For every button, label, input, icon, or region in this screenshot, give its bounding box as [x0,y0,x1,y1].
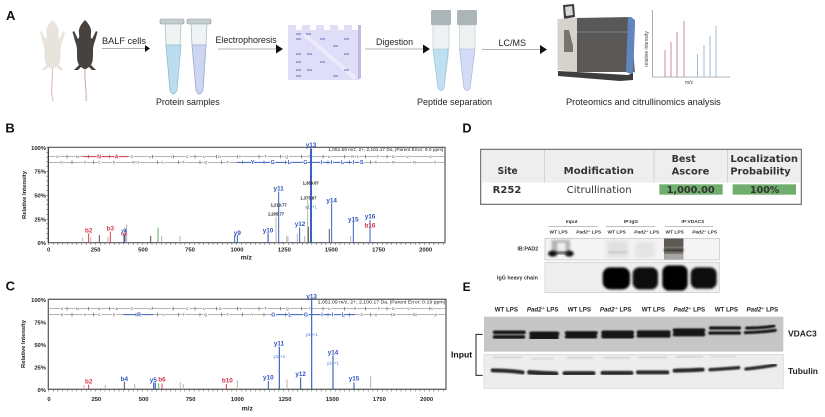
column headers: Input [566,219,578,225]
blot: PAD2 [545,238,719,260]
sequence ladder: L [341,160,345,166]
sequence ladder: G [218,154,221,159]
chart: schematic spectrum: relative intensity [644,31,650,67]
plot frame [48,147,445,243]
y axis: 100% [31,146,47,152]
panel label D: D [462,121,471,135]
peak labels: 1,375.87 [300,195,317,200]
x axis [47,244,445,261]
peak labels: y15 [349,376,360,383]
peak labels: y14 [328,350,339,357]
sequence ladder: Y [239,306,242,311]
y axis: Relative Intensity [22,170,28,219]
sequence ladder: Q [286,306,289,311]
table row: R252 [493,185,521,196]
sequence ladder: F [378,306,381,311]
lane labels: Pad2 [600,307,615,314]
sequence ladder: A [115,154,119,160]
lane labels: WT LPS [568,307,591,314]
sequence ladder: V [407,306,410,311]
icon: protein sample tubes [160,19,211,94]
sequence ladder: N [414,312,417,317]
sequence ladder: V [84,312,87,317]
peak labels: y10 [263,227,274,234]
icon: gel [288,25,361,80]
label: LC/MS: LC/MS [498,38,526,48]
peak labels: y12 [295,371,306,378]
parent ion info: 1,051.59 m/z, 2+, 2,101.17 Da, |Parent Error: 9.0 ppm| [328,147,443,152]
sequence ladder: G [218,306,222,311]
sequence ladder: F [377,154,380,159]
peaks [83,148,370,243]
lane labels: -/- [688,307,691,311]
sequence ladder: V [406,154,409,159]
column headers [548,219,718,236]
sequence ladder: L [288,312,292,318]
x axis: 2000 [420,397,433,403]
sequence ladder: F [113,312,116,317]
sequence ladder: I [332,312,334,318]
sequence ladder: I [321,312,323,318]
lane labels: LPS [691,307,705,314]
table headers [498,154,798,177]
panel: E input western blot [451,280,818,388]
sequence ladder: N [76,306,79,311]
sequence ladder: L [328,154,331,159]
peak labels: y11 [274,341,285,348]
column headers: Pad2 [634,230,646,236]
x axis: 1000 [231,397,244,403]
panel: IP western blot: IgG heavy chain [497,276,538,282]
sequence ladder: Q [204,312,207,317]
sequence ladder: T [308,154,311,159]
column headers: Pad2 [692,230,704,236]
y axis: 0% [38,241,47,247]
sequence ladder: N [98,306,101,311]
sequence ladder: N [97,154,101,160]
table row: 100% [750,185,780,196]
peak labels: b16 [365,223,376,230]
sequence ladder: G [392,306,395,311]
lane labels: -/- [761,307,764,311]
column headers: IP:VDAC3 [681,219,704,225]
peak labels: b6 [158,377,166,384]
x axis: 1000 [231,248,243,254]
chart: schematic spectrum [644,10,730,86]
sequence ladder: R+1 [351,154,359,159]
sequence ladder: T [264,306,267,311]
peak labels: y16 [365,213,376,220]
lane labels: Pad2 [674,307,689,314]
sequence ladder: N [392,160,395,165]
sequence ladder: I [353,160,355,166]
x axis: 1250 [278,248,291,254]
sequence ladder: I [171,154,172,159]
peak labels: 1,205.77 [268,212,285,217]
panel: A workflow [6,4,730,107]
peak labels: y14+1 [327,361,340,366]
sequence ladder: C [98,312,101,317]
x axis: 0 [47,397,51,403]
y axis [22,146,48,247]
x axis: 750 [186,397,196,403]
peak labels: b2 [85,379,93,386]
y axis: Relative Intensity [21,319,27,368]
x axis: 0 [47,248,50,254]
sequence ladder: I [172,306,173,311]
peak labels: y11+1 [305,205,317,210]
sequence ladder: V [435,312,438,317]
y axis: 25% [34,217,47,223]
blot: VDAC3 [484,317,783,352]
lane labels: -/- [542,307,545,311]
y axis: 100% [31,298,47,304]
sequence ladder: G [271,312,275,318]
sequence ladder: K [60,160,63,165]
peak labels: b4 [121,376,129,383]
icon: black mouse [72,20,98,101]
sequence ladder: L [162,160,165,165]
label: peptide separation: Peptide separation [417,97,492,107]
column headers: -/- [646,229,648,233]
table row [493,184,796,196]
icon: peptide tubes [431,10,477,90]
sequence ladder: C [186,306,189,311]
sequence ladder: T [182,312,185,317]
y axis: 25% [34,366,47,372]
sequence ladder: L [203,306,206,311]
column headers: -/- [588,229,590,233]
peak labels: b2 [85,227,93,234]
icon: mass spectrometer [558,4,635,81]
table frame and header [481,149,801,204]
sequence ladder: C [98,160,101,165]
sequence ladder [48,306,446,318]
peak labels: y9 [234,230,241,237]
panel: C spectrum [6,279,446,412]
peak labels: y13+1 [306,332,318,337]
sequence ladder: L [150,306,153,311]
y axis: 75% [34,320,47,326]
sequence ladder: T [182,160,185,165]
x axis: 1250 [279,397,291,403]
peak labels [85,142,376,237]
icon: white mouse [40,20,65,101]
sequence ladder: V [434,160,437,165]
x axis: 250 [91,397,101,403]
x axis: 500 [138,248,148,254]
sequence ladder: K [430,306,433,311]
y axis: 0% [38,388,47,394]
chart: schematic spectrum: m/z [685,80,694,86]
sequence ladder: A [374,160,377,165]
row labels: IB:PAD2 [517,247,538,253]
peak labels: y12 [295,221,306,228]
bracket: input [476,334,483,375]
arrow: to peptide separation [365,44,430,54]
sequence ladder: K [429,154,432,159]
sequence ladder: K [61,312,64,317]
lane labels: LPS [764,307,778,314]
peak labels: b3 [107,226,115,233]
x axis: 1750 [372,248,385,254]
x axis: 500 [139,397,149,403]
sequence ladder: S [130,306,133,311]
sequence ladder: G [303,160,307,166]
sequence ladder: Q [285,154,288,159]
lane labels: WT LPS [715,307,738,314]
peak labels: y4 [121,228,127,234]
sequence ladder: Q [204,160,207,165]
peak labels [85,293,360,386]
sequence ladder: T [264,154,267,159]
y axis: 75% [34,170,47,176]
sequence ladder: N [393,312,396,317]
table headers: Localization [730,154,798,165]
sequence ladder: I [321,160,323,166]
table row: Citrullination [567,185,632,196]
table headers: Site [498,166,518,177]
peak labels: y11+1 [274,354,286,359]
lane labels: WT LPS [495,307,518,314]
sequence ladder: R [137,312,141,318]
labels: blot targets: VDAC3 [788,328,817,338]
panel: D table [462,121,801,204]
x axis: 1750 [373,397,386,403]
sequence ladder: A [115,306,118,311]
column headers: WT LPS [608,230,627,236]
table headers: Modification [564,166,634,177]
sequence ladder: N [413,160,416,165]
sequence ladder [48,154,445,166]
column headers: LPS [648,230,660,236]
column headers: -/- [704,229,706,233]
lane labels: Pad2 [747,307,762,314]
column headers: LPS [706,230,718,236]
sequence ladder: S [360,160,364,166]
sequence ladder: L [328,306,331,311]
arrow: to protein samples [102,45,150,52]
peaks [84,299,371,389]
sequence ladder: S [360,312,363,317]
panel label A: A [6,8,16,23]
x axis: 2000 [419,248,432,254]
column headers: Pad2 [576,230,588,236]
label: electrophoresis: Electrophoresis [216,35,277,45]
arrow: to gel [218,44,283,54]
peak labels: y14 [326,197,337,204]
x axis: 1500 [326,397,339,403]
sequence ladder: V [61,306,64,311]
panel label B: B [5,121,15,136]
lane labels [495,307,778,314]
label: digestion: Digestion [376,37,413,47]
table headers: Ascore [672,166,710,177]
parent ion info: 1,051.09 m/z, 2+, 2,100.17 Da, |Parent Error: 0.19 ppm| [318,299,445,304]
panel: E input western blot: Tubulin [788,366,818,376]
x axis: 250 [91,248,101,254]
panel: IP western blot [497,219,719,293]
sequence ladder: C [186,154,189,159]
sequence ladder: R+1 [132,160,140,165]
label: proteomics analysis: Proteomics and citrullinomics analysis [566,97,721,107]
column headers: IP:IgG [624,219,638,225]
peak labels: y5 [150,377,157,384]
label: protein samples: Protein samples [156,97,220,107]
peak labels: y13 [306,142,317,149]
panel: B spectrum [5,121,445,261]
panel label E: E [463,280,471,294]
panel label C: C [6,279,16,294]
y axis: 50% [34,194,47,200]
lane labels: -/- [615,307,618,311]
lane labels: LPS [618,307,631,314]
sequence ladder: Y [239,154,242,159]
sequence ladder: G [271,160,275,166]
y axis [21,298,47,394]
peak labels: b4 [121,231,127,237]
sequence ladder: V [56,154,59,159]
x axis: 1500 [325,248,338,254]
x axis: 750 [185,248,195,254]
blot: IgG heavy chain [545,262,719,293]
sequence ladder: V [84,160,87,165]
peak labels: y10 [263,375,274,382]
label: input: Input [451,349,472,359]
column headers: WT LPS [666,230,685,236]
sequence ladder: F [113,160,116,165]
peak labels: y13 [306,293,317,300]
sequence ladder: T [309,306,312,311]
peak labels: y11 [274,186,284,193]
lane labels: WT LPS [642,307,665,314]
peak labels: 1,389.87 [303,180,319,185]
sequence ladder: L [163,312,166,317]
sequence ladder: T [226,160,229,165]
x axis: m/z [242,405,254,412]
sequence ladder: L [288,160,292,166]
sequence ladder: L [203,154,206,159]
sequence ladder: S [130,154,133,159]
sequence ladder: G [392,154,395,159]
table headers: Probability [730,166,791,177]
column headers: LPS [590,230,602,236]
arrow: to instrument [482,45,547,54]
lane labels: LPS [545,307,558,314]
sequence ladder: T [226,312,229,317]
peak labels: y15 [348,216,359,223]
sequence ladder: L [149,154,152,159]
x axis: m/z [241,254,253,261]
column headers: WT LPS [550,230,569,236]
y axis: 50% [34,343,47,349]
sequence ladder: N [76,154,79,159]
sequence ladder: A [375,312,378,317]
sequence ladder: Y [251,312,254,317]
table row: 1,000.00 [667,185,715,196]
blot: tubulin [484,354,783,388]
plot frame [48,299,446,389]
peak labels: 1,219.77 [271,203,287,208]
sequence ladder: G [304,312,308,318]
sequence ladder: Y [251,160,255,166]
lane labels: Pad2 [527,307,542,314]
sequence ladder: R [354,306,357,311]
sequence ladder: I [331,160,333,166]
table headers: Best [672,154,696,165]
peak labels: b10 [222,378,233,385]
sequence ladder: L [342,312,346,318]
label: BALF cells: BALF cells [102,36,146,46]
x axis [47,391,446,412]
